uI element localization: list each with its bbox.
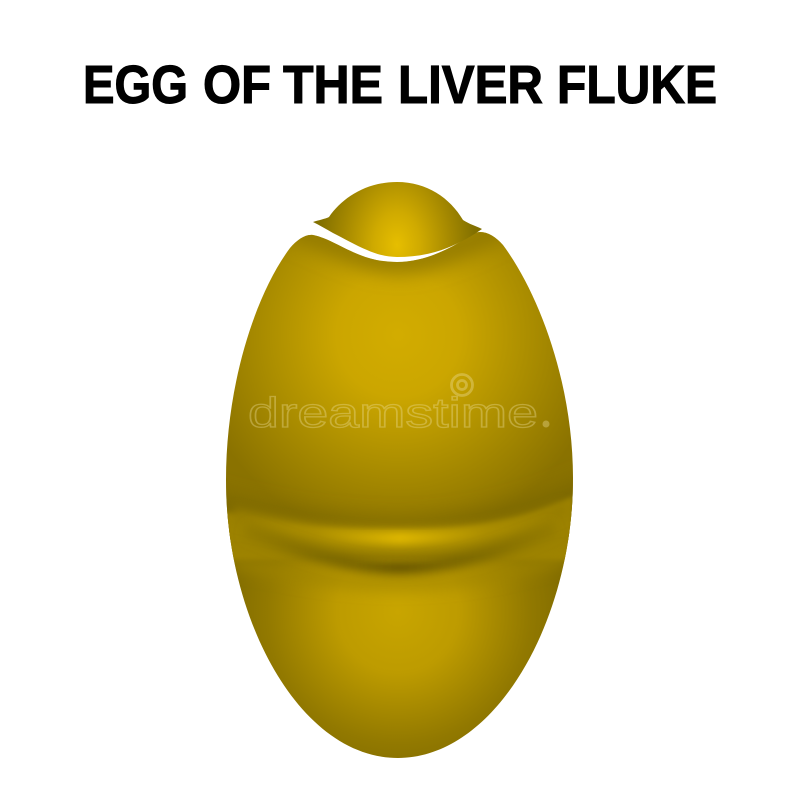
bright fold highlight	[232, 508, 566, 538]
watermark registered mark	[542, 420, 550, 428]
base of the fold	[226, 496, 573, 560]
dark shadow under the cap notch	[290, 225, 505, 262]
title	[83, 55, 717, 115]
title: FLUKE	[557, 55, 717, 115]
lower shell shading	[229, 530, 570, 758]
watermark wordmark: dreamstime	[248, 389, 538, 436]
egg body	[226, 232, 573, 758]
upper shell shading	[226, 232, 573, 540]
soft transition under the crease	[230, 557, 570, 584]
title: LIVER	[398, 55, 543, 115]
title: THE	[283, 55, 383, 115]
dark crease below the fold	[245, 528, 555, 568]
watermark spiral	[452, 374, 472, 396]
watermark	[248, 374, 550, 436]
shadow above the central fold	[226, 480, 573, 534]
egg cap (operculum)	[313, 182, 482, 257]
title: EGG	[83, 55, 188, 115]
infographic canvas	[86, 64, 716, 758]
title: OF	[203, 55, 271, 115]
